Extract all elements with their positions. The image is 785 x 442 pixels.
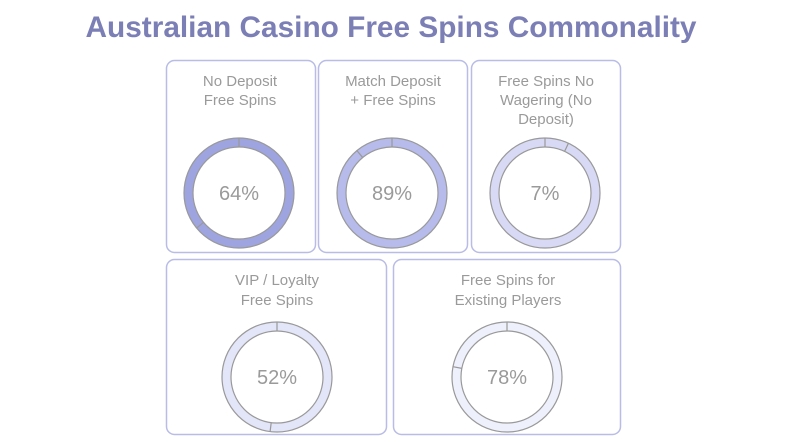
panel: vip loyalty: Free Spins xyxy=(241,292,313,309)
panel: match deposit: Match Deposit xyxy=(345,73,442,90)
panel: existing players: Existing Players xyxy=(455,292,561,309)
donut: 64% xyxy=(184,138,294,248)
title: Australian Casino Free Spins Commonality xyxy=(86,11,697,44)
donut: 78% xyxy=(452,322,562,432)
panel: existing players: Free Spins for xyxy=(461,272,555,289)
panel: no wagering xyxy=(472,60,620,252)
panel: match deposit: + Free Spins xyxy=(350,92,436,109)
panel: match deposit xyxy=(318,60,468,252)
panel: no deposit free spins: No Deposit xyxy=(203,73,278,90)
donut: 52%: 52% xyxy=(257,367,297,389)
donut: 7% xyxy=(490,138,600,248)
donut: 64%: 64% xyxy=(219,183,259,205)
donut: 89%: 89% xyxy=(372,183,412,205)
panel: no wagering: Wagering (No xyxy=(500,92,592,109)
donut: 52% xyxy=(222,322,332,432)
panel: no wagering: Free Spins No xyxy=(498,73,594,90)
donut: 89% xyxy=(337,138,447,248)
donut: 78%: 78% xyxy=(487,367,527,389)
panel: vip loyalty xyxy=(166,260,386,434)
donut: 7%: 7% xyxy=(531,183,560,205)
panel: no deposit free spins xyxy=(166,60,316,252)
panel: no wagering: Deposit) xyxy=(518,111,574,128)
panel: vip loyalty: VIP / Loyalty xyxy=(235,272,319,289)
panel: no deposit free spins: Free Spins xyxy=(204,92,276,109)
panel: existing players xyxy=(394,260,620,434)
